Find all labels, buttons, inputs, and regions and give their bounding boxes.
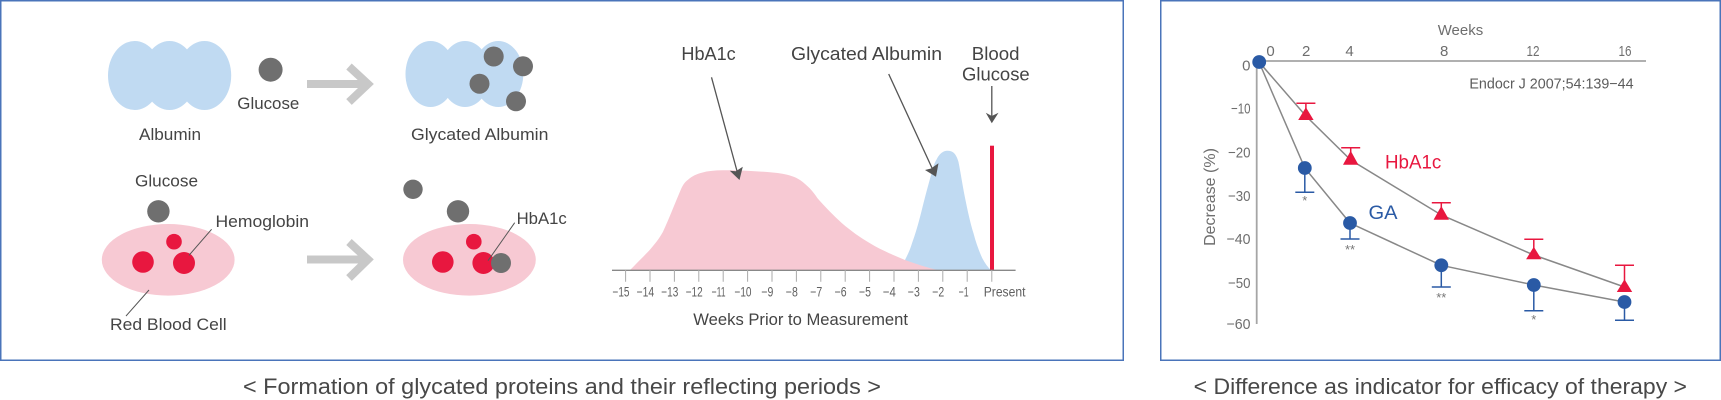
caption: difference as indicator: < Difference as indicator for efficacy of therapy > — [1194, 374, 1687, 399]
citation: Endocr J 2007;54:139−44 — [1469, 77, 1634, 93]
axis: weeks prior: −5 — [859, 285, 871, 300]
panel: efficacy of therapy — [1161, 1, 1720, 360]
axis: weeks prior: −12 — [686, 285, 703, 300]
axis: weeks prior: −14 — [637, 285, 655, 300]
series: GA — [1252, 55, 1634, 320]
arrow: glycated albumin — [889, 74, 938, 177]
x axis labels: 2 — [1302, 43, 1310, 60]
significance markers: ** — [1345, 242, 1355, 257]
axis: weeks prior: −2 — [932, 285, 944, 300]
axis: weeks prior: −7 — [810, 285, 822, 300]
axis title: Weeks Prior to Measurement — [693, 310, 908, 329]
label: HbA1c curve: HbA1c — [681, 44, 736, 64]
caption: formation of glycated proteins: < Formation of glycated proteins and their reflecting periods > — [243, 374, 881, 399]
axis: weeks prior: −13 — [661, 285, 678, 300]
icon: albumin — [108, 41, 231, 110]
axis: weeks prior: Present — [984, 285, 1026, 300]
axes — [1257, 61, 1646, 324]
icon: red blood cell with hemoglobin — [102, 200, 235, 316]
marker: blood glucose present bar — [990, 146, 994, 270]
arrow: hemoglobin reaction — [307, 242, 368, 278]
y axis labels: −60 — [1226, 316, 1250, 333]
x axis labels — [1266, 43, 1632, 60]
panel: formation of glycated proteins — [1, 1, 1123, 360]
axis: weeks prior: −4 — [883, 285, 896, 300]
axis: weeks prior: −10 — [734, 285, 752, 300]
axis: weeks prior: −3 — [908, 285, 920, 300]
y axis labels: −20 — [1228, 145, 1250, 162]
chart: reflecting periods — [612, 44, 1030, 329]
arrow: albumin reaction — [307, 66, 368, 102]
label: glycated albumin curve: Glycated Albumin — [791, 44, 942, 64]
label: albumin: Albumin — [139, 125, 201, 144]
axis: weeks prior: −15 — [612, 285, 630, 300]
axis: weeks prior: −11 — [712, 285, 726, 300]
x axis labels: 12 — [1526, 43, 1540, 60]
y axis labels: 0 — [1242, 58, 1250, 75]
x axis labels: 16 — [1618, 43, 1632, 60]
line chart: decrease over weeks — [1202, 22, 1646, 333]
axis: weeks prior: −9 — [761, 285, 773, 300]
series: HbA1c — [1259, 62, 1634, 292]
significance markers: * — [1531, 312, 1536, 327]
axis: weeks prior — [612, 270, 1026, 300]
y axis labels: −40 — [1226, 231, 1250, 248]
significance markers — [1302, 193, 1536, 327]
arrow: HbA1c — [712, 77, 743, 180]
axis: weeks prior: −8 — [786, 285, 798, 300]
label: blood glucose: Blood — [972, 44, 1020, 64]
series label: GA: GA — [1368, 203, 1398, 224]
label: red blood cell: Red Blood Cell — [110, 315, 227, 334]
axis: weeks prior: −1 — [959, 285, 969, 300]
arrow: blood glucose — [986, 86, 998, 123]
label: blood glucose: Glucose — [962, 65, 1030, 85]
x axis labels: 4 — [1345, 43, 1354, 60]
x axis labels: 0 — [1266, 43, 1275, 60]
label: glucose: Glucose — [237, 94, 299, 113]
y axis labels: −30 — [1228, 188, 1250, 205]
area: glycated albumin period — [905, 151, 991, 270]
series label: HbA1c: HbA1c — [1385, 152, 1441, 173]
icon: glycated albumin — [406, 41, 533, 111]
area: HbA1c period — [630, 170, 938, 270]
significance markers: * — [1302, 193, 1307, 208]
y axis labels: −50 — [1228, 275, 1250, 292]
axis: weeks prior: −6 — [835, 285, 847, 300]
significance markers: ** — [1436, 290, 1446, 305]
axis title: weeks: Weeks — [1438, 22, 1483, 39]
label: hemoglobin: Hemoglobin — [216, 212, 309, 231]
x axis labels: 8 — [1440, 43, 1448, 60]
icon: red blood cell with HbA1c — [403, 180, 536, 296]
y axis title: Decrease (%) — [1202, 148, 1219, 246]
label: HbA1c: HbA1c — [517, 209, 567, 228]
icon: glucose molecule — [259, 58, 283, 82]
y axis labels: −10 — [1231, 100, 1250, 117]
label: glucose above red blood cell: Glucose — [135, 172, 198, 190]
y axis labels — [1226, 58, 1250, 333]
label: glycated albumin: Glycated Albumin — [411, 125, 548, 144]
